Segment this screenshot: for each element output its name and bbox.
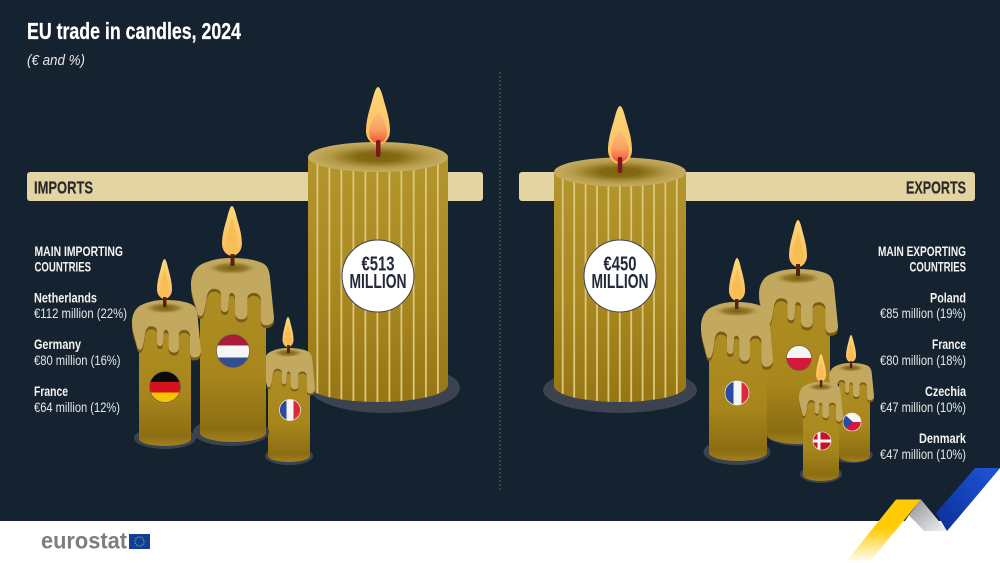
text block: main exporting countries: COUNTRIES xyxy=(910,258,966,274)
text block: main exporting countries: €47 million (10%) xyxy=(880,399,966,415)
flag: Czechia xyxy=(842,412,862,432)
text block: main exporting countries: €85 million (19%) xyxy=(880,305,966,321)
flame xyxy=(222,206,242,256)
text block: main exporting countries: Denmark xyxy=(919,430,966,446)
candle: Poland xyxy=(759,220,838,446)
text block: main exporting countries: Poland xyxy=(930,290,966,306)
subtitle: (€ and %) xyxy=(27,53,85,69)
text block: main importing countries xyxy=(34,243,127,415)
logo: eurostat: eurostat xyxy=(41,528,127,554)
flame xyxy=(789,220,807,267)
candle: France exports xyxy=(701,258,773,465)
heading: imports: IMPORTS xyxy=(34,177,93,197)
candle: Netherlands xyxy=(191,206,274,446)
flag: Germany xyxy=(149,371,181,404)
text block: main importing countries: France xyxy=(34,383,68,399)
ribbon: blue xyxy=(936,468,1000,531)
flag: France xyxy=(279,399,302,421)
candle: Czechia xyxy=(829,335,874,463)
text block: main exporting countries: €80 million (18%) xyxy=(880,352,966,368)
flame xyxy=(846,335,856,362)
text block: main importing countries: COUNTRIES xyxy=(34,258,91,274)
text block: main importing countries: €64 million (12%) xyxy=(34,399,120,415)
flame xyxy=(816,354,826,382)
flame xyxy=(157,259,172,299)
title: EU trade in candles, 2024 xyxy=(27,18,241,44)
panel: exports banner xyxy=(519,172,975,201)
value badge: €450 xyxy=(604,254,636,276)
flag: France xyxy=(725,381,750,405)
flame xyxy=(729,258,745,301)
flag: Poland xyxy=(786,345,812,372)
flag: Netherlands xyxy=(216,334,250,369)
footer xyxy=(0,468,1000,563)
value badge: €513 xyxy=(362,254,394,276)
wick xyxy=(376,140,380,157)
flame xyxy=(282,317,294,347)
text block: main importing countries: €112 million (22%) xyxy=(34,305,127,321)
candle: Denmark xyxy=(799,354,843,483)
wick xyxy=(618,157,622,173)
text block: main importing countries: MAIN IMPORTING xyxy=(34,243,123,259)
large candle: exports total xyxy=(543,106,697,413)
icon: EU flag xyxy=(129,534,150,549)
text block: main importing countries: €80 million (16%) xyxy=(34,352,120,368)
text block: main exporting countries xyxy=(878,243,966,462)
text block: main exporting countries: Czechia xyxy=(925,383,966,399)
text block: main exporting countries: €47 million (10%) xyxy=(880,446,966,462)
flag: Denmark xyxy=(812,431,832,451)
text block: main exporting countries: France xyxy=(932,336,966,352)
large candle: imports total xyxy=(308,87,460,413)
heading: exports: EXPORTS xyxy=(906,177,966,197)
candle: Germany xyxy=(132,259,201,449)
panel: imports banner xyxy=(27,172,483,201)
text block: main importing countries: Netherlands xyxy=(34,290,97,306)
flame xyxy=(366,87,390,145)
candle: France imports xyxy=(263,317,315,465)
ribbon: grey xyxy=(909,500,947,531)
value badge: MILLION xyxy=(592,271,648,293)
text block: main exporting countries: MAIN EXPORTING xyxy=(878,243,966,259)
value badge xyxy=(584,240,656,312)
value badge xyxy=(342,240,414,312)
ribbon: yellow xyxy=(845,500,921,563)
text block: main importing countries: Germany xyxy=(34,336,81,352)
flame xyxy=(608,106,632,164)
value badge: MILLION xyxy=(350,271,406,293)
